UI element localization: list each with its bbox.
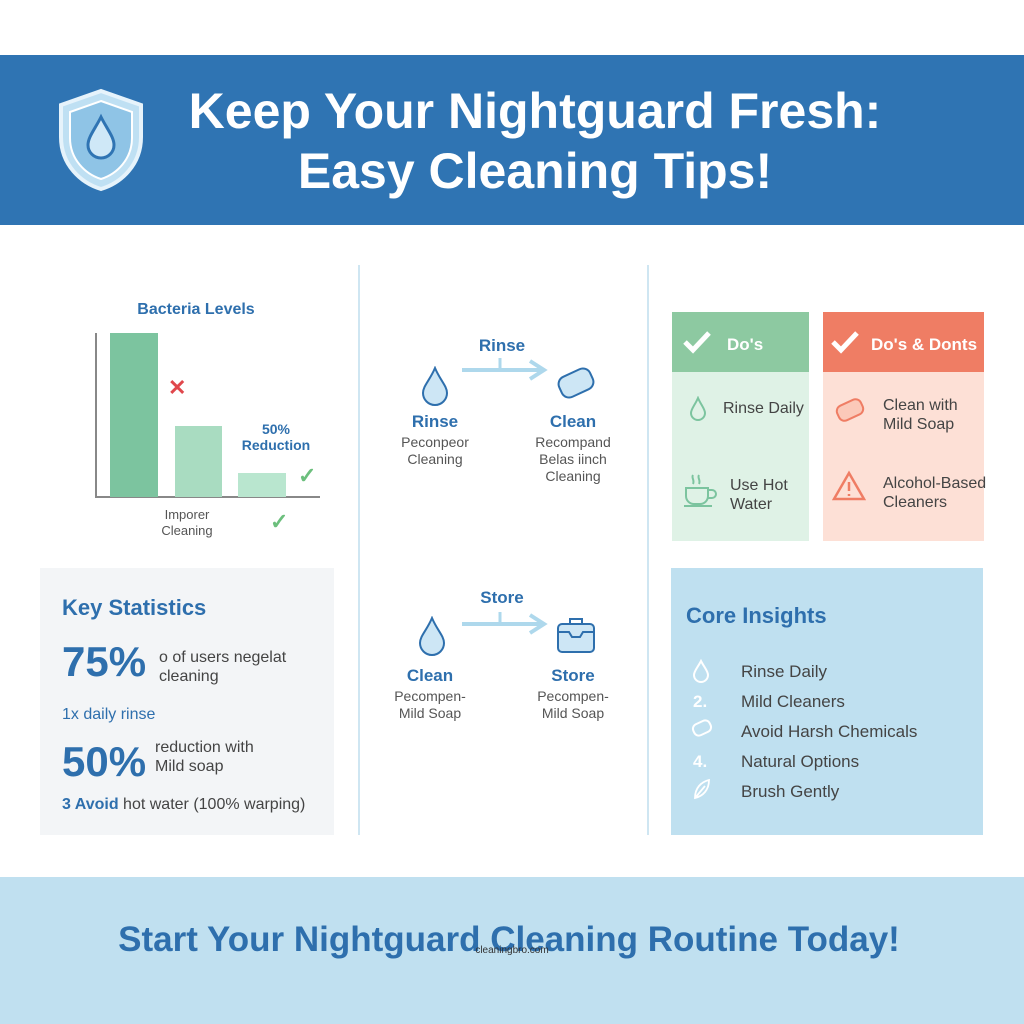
title: Easy Cleaning Tips! [298,143,772,199]
flow: clean to store: Mild Soap [399,705,461,721]
panel: do's & donts: Clean with [883,397,958,414]
flow: clean to store: Store [480,588,524,607]
panel: do's & donts: Mild Soap [883,416,954,433]
divider lines [358,265,360,835]
flow: rinse to clean: Clean [550,412,596,431]
panel: do's: Do's [727,335,763,354]
flow: rinse to clean: Belas iinch [539,451,607,467]
icon: shield with drop [59,88,143,192]
footer band [0,877,1024,1024]
panel: key statistics [40,568,334,835]
bar chart: bacteria levels: ✓ [298,463,316,488]
panel: key statistics: 75% [62,638,146,685]
panel: core insights: Rinse Daily [741,662,827,681]
panel: key statistics: Mild soap [155,758,223,775]
bar chart: bacteria levels: Bacteria Levels [137,301,255,318]
flow: rinse to clean [401,336,611,484]
panel: do's: Water [730,496,772,513]
bar chart: bacteria levels: ✕ [168,375,186,400]
footer call to action: Start Your Nightguard Cleaning Routine Today! [118,920,900,959]
flow: rinse to clean: Recompand [535,434,611,450]
header band [0,55,1024,225]
flow: clean to store: Pecompen- [394,688,466,704]
panel: key statistics: 3 Avoid hot water (100% warping) [62,796,305,813]
flow: clean to store: Clean [407,666,453,685]
panel: key statistics: o of users negelat [159,649,286,666]
bar chart: bacteria levels: Imporer [165,507,209,522]
bar chart: bacteria levels: Reduction [242,437,310,453]
panel: do's: Use Hot [730,477,788,494]
panel: key statistics: reduction with [155,739,254,756]
panel: do's & donts: Cleaners [883,494,947,511]
panel: core insights: Avoid Harsh Chemicals [741,722,917,741]
panel: key statistics: 50% [62,738,146,785]
panel: do's & donts [823,312,984,541]
panel: core insights: Brush Gently [741,782,839,801]
title: Keep Your Nightguard Fresh: [189,83,881,139]
flow: rinse to clean: Rinse [412,412,458,431]
flow: rinse to clean: Peconpeor [401,434,469,450]
bar chart: bacteria levels [95,301,320,538]
flow: rinse to clean: Rinse [479,336,525,355]
panel: key statistics: Key Statistics [62,595,206,620]
panel: core insights: Natural Options [741,752,859,771]
panel: key statistics: cleaning [159,668,219,685]
flow: clean to store: Pecompen- [537,688,609,704]
panel: do's & donts: Do's & Donts [871,335,977,354]
panel: core insights [671,568,983,835]
bar chart: bacteria levels: ✓ [270,509,288,534]
flow: rinse to clean: Cleaning [545,468,601,484]
panel: do's [672,312,809,541]
panel: do's & donts: Alcohol-Based [883,475,986,492]
bar chart: bacteria levels: 50% [262,421,290,437]
panel: core insights: Mild Cleaners [741,692,845,711]
panel: core insights: Core Insights [686,603,827,628]
panel: core insights: 4. [693,752,707,771]
flow: clean to store: Store [551,666,595,685]
bar chart: bacteria levels: Cleaning [161,523,213,538]
panel: do's: Rinse Daily [723,400,804,417]
flow: clean to store [394,588,609,721]
title [189,83,881,199]
footer band: cleaningbro.com [475,945,549,956]
panel: key statistics: 1x daily rinse [62,706,155,723]
flow: clean to store: Mild Soap [542,705,604,721]
panel: core insights: 2. [693,692,707,711]
flow: rinse to clean: Cleaning [407,451,463,467]
